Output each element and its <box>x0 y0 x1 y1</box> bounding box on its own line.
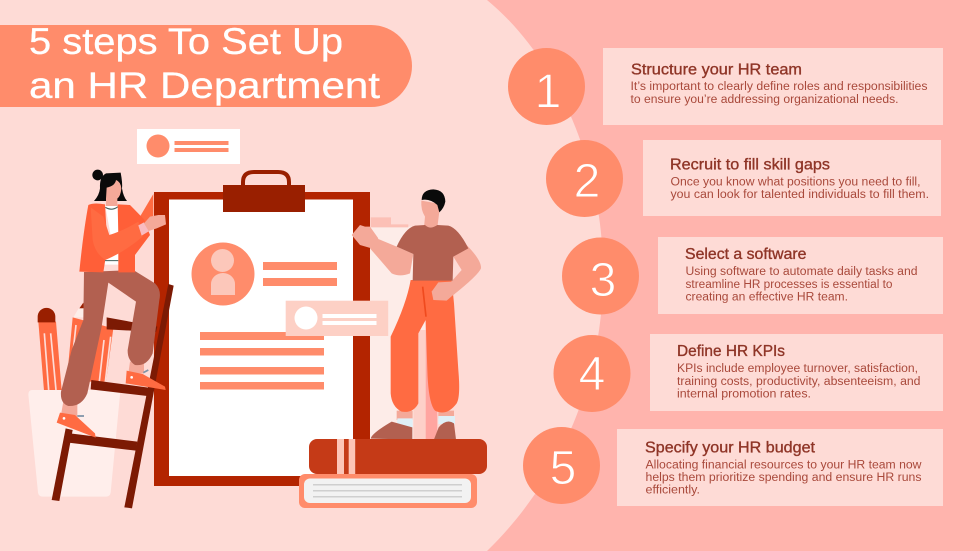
step 4: training costs, productivity, absenteeism, and <box>677 376 920 388</box>
step 3: 3 <box>590 254 616 307</box>
right curved background <box>487 0 980 551</box>
step 1: Structure your HR team <box>631 62 802 78</box>
floating profile card: clipboard <box>286 301 388 336</box>
ladder <box>52 284 174 508</box>
step 4 <box>554 334 943 412</box>
illustration: woman on ladder <box>52 170 174 508</box>
step 1: to ensure you’re addressing organizational needs. <box>630 94 898 106</box>
step 4: internal promotion rates. <box>677 388 811 400</box>
step 5: 5 <box>550 442 576 495</box>
step 5: helps them prioritize spending and ensure HR runs <box>646 472 922 484</box>
step 4: Define HR KPIs <box>677 343 785 360</box>
step 2: 2 <box>574 155 600 208</box>
step 2: you can look for talented individuals to fill them. <box>670 189 929 201</box>
step 3 <box>562 237 943 314</box>
step 3: streamline HR processes is essential to <box>686 279 892 291</box>
title banner <box>0 21 412 107</box>
step 3: Using software to automate daily tasks and <box>686 266 918 278</box>
title banner: 5 steps To Set Up <box>29 21 343 62</box>
step 4: KPIs include employee turnover, satisfaction, <box>677 363 918 375</box>
step 4: 4 <box>579 348 605 401</box>
illustration: man on books <box>352 189 481 439</box>
woman figure <box>57 170 166 438</box>
step 2: Once you know what positions you need to fill, <box>670 176 920 188</box>
step 2: Recruit to fill skill gaps <box>670 156 830 174</box>
step 3: Select a software <box>685 246 806 263</box>
title banner: an HR Department <box>29 65 381 106</box>
step 5: efficiently. <box>646 485 700 497</box>
step 3: creating an effective HR team. <box>686 292 848 304</box>
step 5 <box>523 427 943 506</box>
books <box>299 439 487 508</box>
step 2 <box>546 140 941 217</box>
floating profile card: top <box>137 129 240 164</box>
step 5: Specify your HR budget <box>645 440 816 456</box>
step 5: Allocating financial resources to your HR team now <box>646 460 922 472</box>
man figure <box>352 189 481 439</box>
step 1 <box>508 48 943 125</box>
clipboard <box>154 172 370 486</box>
pencil cup with pencils <box>28 303 120 497</box>
step 1: It’s important to clearly define roles and responsibilities <box>630 81 928 93</box>
step 1: 1 <box>535 66 561 118</box>
